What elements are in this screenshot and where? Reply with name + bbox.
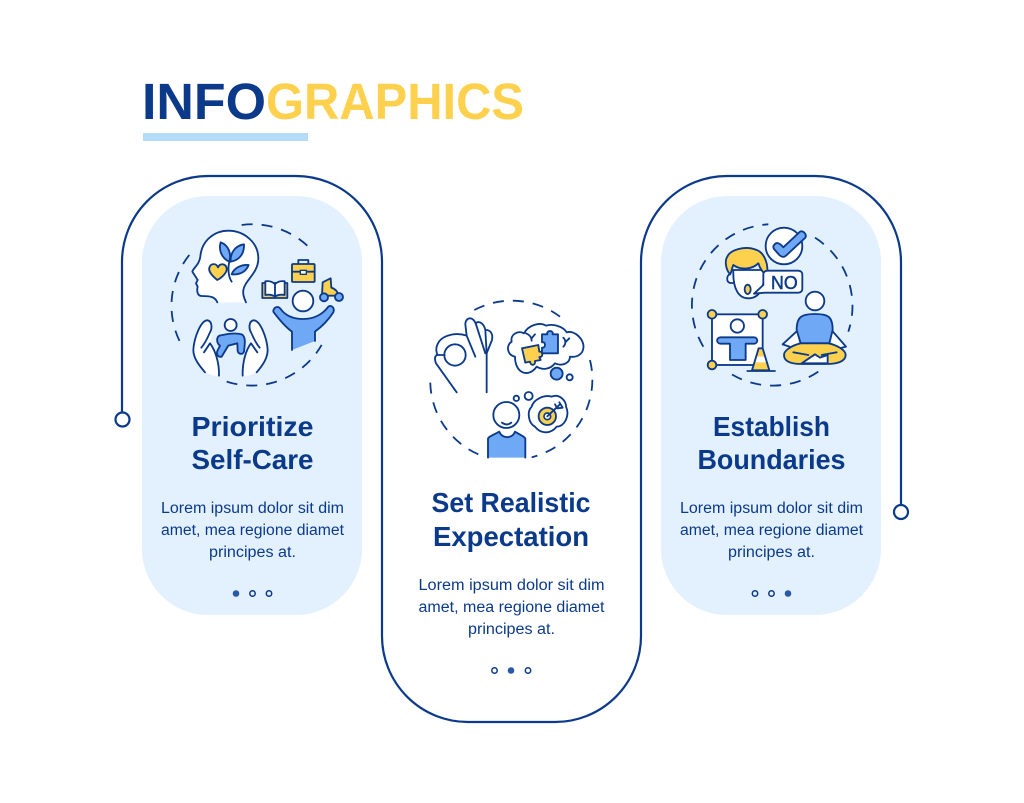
text block: set realistic expectation: amet, mea regione diamet [418,599,605,616]
dashed circle [430,301,592,457]
icon: face saying no [726,248,802,298]
dashed circle [692,224,852,386]
pagination dots: first active [233,590,272,597]
text block: establish boundaries [680,500,864,561]
icon: meditating person [783,292,846,364]
text block: establish boundaries: amet, mea regione diamet [680,522,864,539]
title: GRAPHICS [266,73,524,130]
pagination dots: third active [752,590,791,597]
icon: OK hand [435,318,492,392]
text block: prioritize self-care: Lorem ipsum dolor sit dim [161,500,344,517]
icon: person in boundary square with cone [708,310,775,371]
heading: prioritize self-care [192,411,314,475]
heading: establish boundaries: Establish [713,411,830,442]
icon: head with plant [192,231,258,302]
dashed circle [171,224,322,386]
panel: prioritize self-care background [142,196,362,615]
icon: caring hands with figure [193,319,268,376]
heading: prioritize self-care: Prioritize [192,411,314,442]
heading: set realistic expectation: Expectation [433,521,589,552]
heading: establish boundaries: Boundaries [698,444,846,475]
icon group: self-care [171,224,343,386]
icon group: boundaries [692,224,852,386]
pagination dots: second active [492,667,531,674]
text block: set realistic expectation [418,577,605,638]
icon: target thought [529,396,567,432]
text block: establish boundaries: principes at. [728,544,815,561]
title: INFO [142,73,266,130]
text block: prioritize self-care: amet, mea regione diamet [161,522,345,539]
heading: establish boundaries [698,411,846,475]
text block: prioritize self-care: principes at. [209,544,296,561]
heading: set realistic expectation [432,487,590,552]
heading: set realistic expectation: Set Realistic [432,487,590,518]
text block: establish boundaries: Lorem ipsum dolor sit dim [680,500,863,517]
heading: prioritize self-care: Self-Care [192,444,314,475]
connecting outline [116,176,908,722]
icon: person arms raised [273,291,334,350]
icon: smiling person [488,392,533,458]
text block: set realistic expectation: Lorem ipsum dolor sit dim [418,577,604,594]
icon: book [262,281,287,298]
icon: briefcase [292,260,315,282]
icon: check mark circle [766,228,806,264]
icon group: realistic expectation [430,301,592,458]
panel: establish boundaries background [661,196,881,615]
text block: set realistic expectation: principes at. [468,621,555,638]
icon: face saying no: NO [771,272,798,293]
title [142,73,524,130]
icon: thought cloud with puzzle [508,324,584,380]
title underline [143,133,308,141]
text block: prioritize self-care [161,500,345,561]
icon: roller skate [320,278,343,301]
